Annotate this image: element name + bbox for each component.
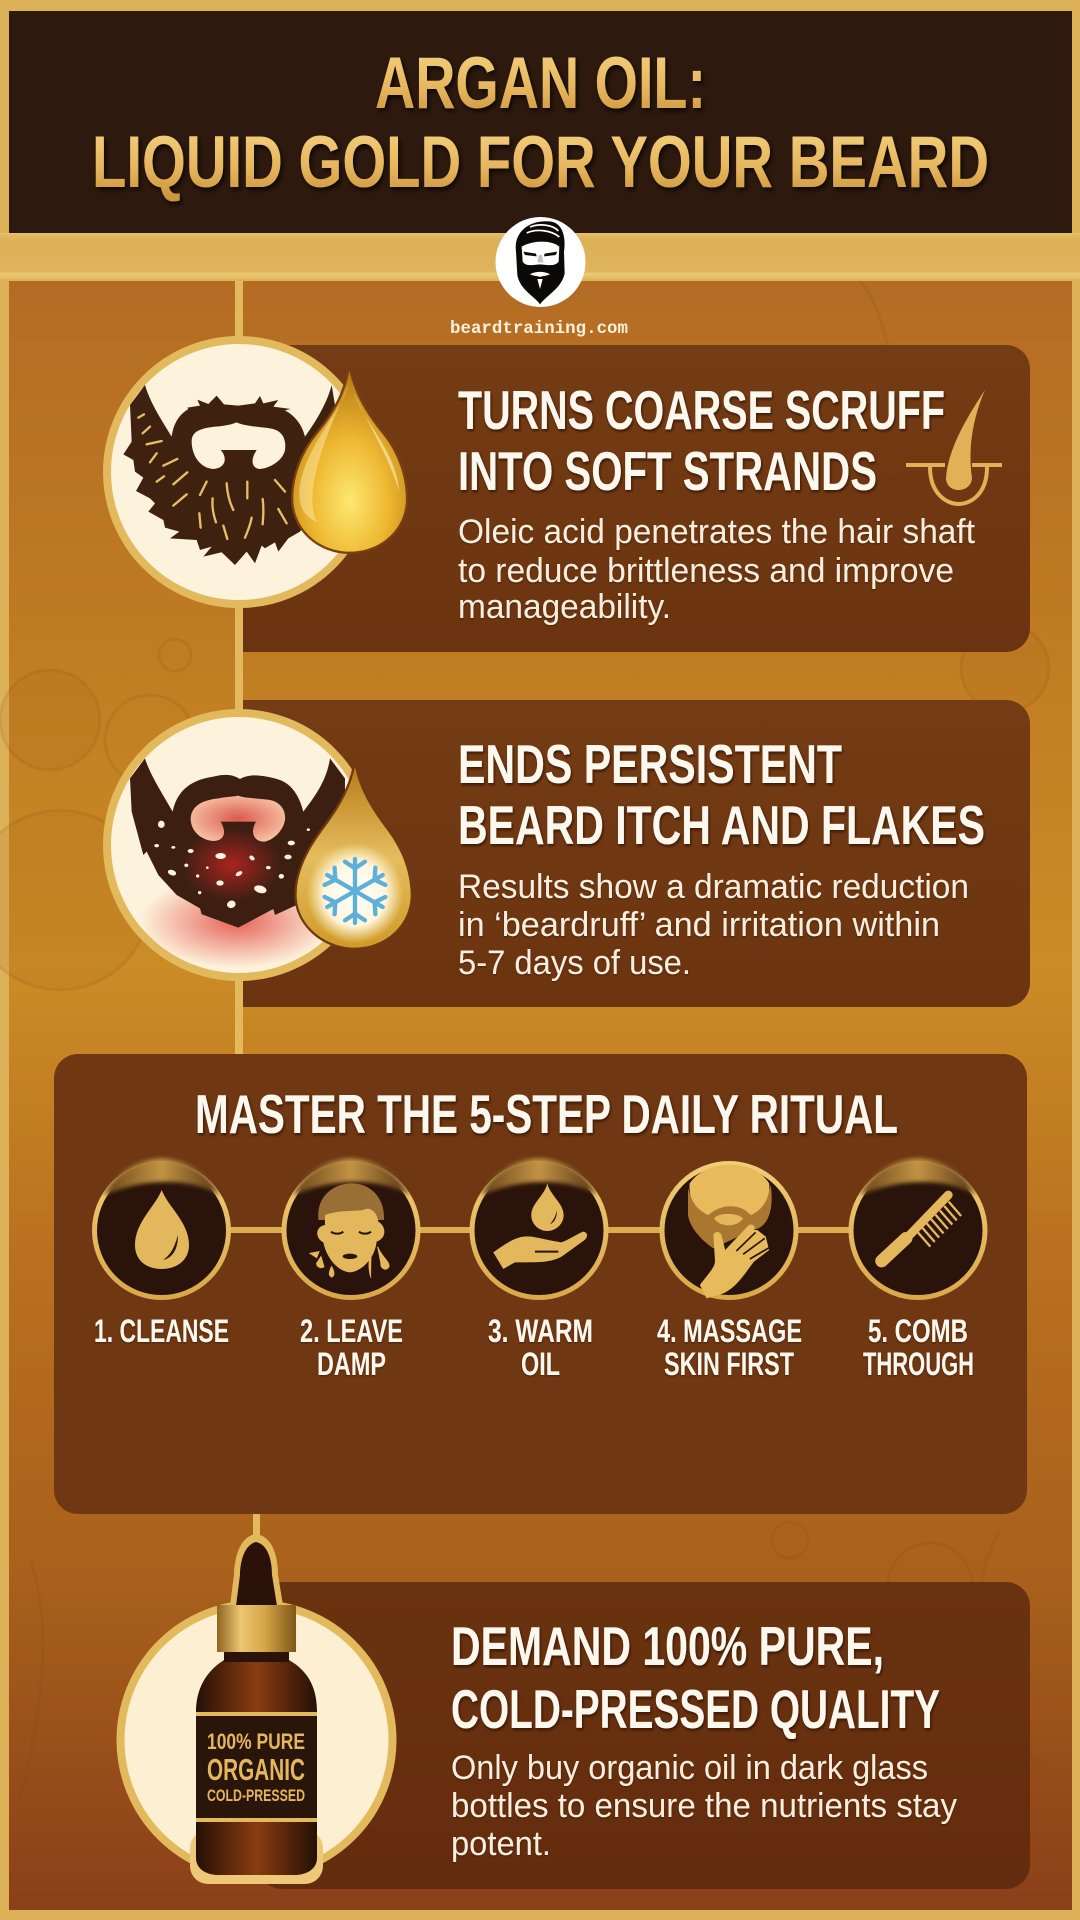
step 2 label: 2. LEAVE <box>300 1313 403 1349</box>
logo caption: beardtraining.com <box>450 319 628 339</box>
step 5 label: THROUGH <box>863 1346 974 1382</box>
bottle label: COLD-PRESSED <box>207 1786 305 1805</box>
icon: coarse beard with oil drop <box>107 340 406 604</box>
cooling drop <box>297 767 411 948</box>
quality body <box>451 1749 957 1863</box>
bottle label: ORGANIC <box>207 1752 305 1787</box>
gold collar <box>217 1605 296 1652</box>
connector to bottle <box>253 1514 260 1538</box>
step 1: cleanse <box>94 1159 229 1349</box>
itch heading: ENDS PERSISTENT <box>458 733 842 795</box>
step 5 label: 5. COMB <box>868 1313 968 1349</box>
step 4 label: 4. MASSAGE <box>657 1313 802 1349</box>
soft strands body: Oleic acid penetrates the hair shaft <box>458 513 976 551</box>
step 3: warm oil <box>472 1159 606 1382</box>
quality heading <box>451 1615 940 1740</box>
quality body: bottles to ensure the nutrients stay <box>451 1787 957 1825</box>
bottle base halo <box>190 1830 323 1884</box>
panel: pure quality <box>258 1582 1030 1889</box>
step 4 label <box>657 1313 802 1382</box>
bottle label: 100% PURE <box>207 1729 305 1754</box>
itch body: Results show a dramatic reduction <box>458 868 969 906</box>
step connector <box>225 1227 855 1233</box>
panel: itch and flakes <box>243 700 1030 1007</box>
header bar <box>9 11 1072 233</box>
icon: dark glass bottle <box>120 1540 392 1884</box>
panel: soft strands <box>243 345 1030 652</box>
panel: five step ritual <box>54 1054 1027 1514</box>
soft strands body <box>458 513 976 626</box>
itch body <box>458 868 969 982</box>
itch heading <box>458 733 985 856</box>
soft strands heading: INTO SOFT STRANDS <box>458 440 877 502</box>
soft strands body: to reduce brittleness and improve <box>458 552 954 590</box>
bottle label <box>196 1712 317 1822</box>
whiskers <box>138 414 287 539</box>
title: ARGAN OIL: <box>375 43 706 124</box>
coarse beard <box>123 385 340 565</box>
quality body: potent. <box>451 1825 551 1863</box>
irritated beard <box>130 758 345 928</box>
step 3 label: OIL <box>521 1346 560 1382</box>
bottle shoulder shade <box>224 1652 289 1662</box>
step 2 label: DAMP <box>317 1346 386 1382</box>
snowflake <box>322 859 388 923</box>
step 2: leave damp <box>284 1159 418 1382</box>
dropper bulb <box>236 1542 277 1606</box>
title <box>92 43 989 203</box>
flakes <box>154 821 310 909</box>
vertical timeline line <box>235 281 243 1055</box>
itch body: 5-7 days of use. <box>458 944 691 982</box>
quality body: Only buy organic oil in dark glass <box>451 1749 928 1787</box>
amber bottle <box>196 1652 317 1875</box>
step 4: massage skin first <box>657 1164 802 1382</box>
icon: irritated beard with cooling drop <box>107 713 411 977</box>
step 2 label <box>300 1313 403 1382</box>
gold band under header <box>0 233 1080 281</box>
soft strands heading <box>458 379 945 502</box>
icon: hair follicle <box>906 390 1002 504</box>
quality heading: DEMAND 100% PURE, <box>451 1615 884 1677</box>
itch body: in ‘beardruff’ and irritation within <box>458 906 940 944</box>
step 3 label <box>488 1313 593 1382</box>
step 5: comb through <box>851 1159 985 1382</box>
logo: bearded man <box>496 217 586 307</box>
dropper halo <box>236 1540 277 1606</box>
step 1 label: 1. CLEANSE <box>94 1313 229 1349</box>
skin redness <box>146 890 320 966</box>
step 5 label <box>863 1313 974 1382</box>
oil drop <box>293 371 406 552</box>
step 3 label: 3. WARM <box>488 1313 593 1349</box>
step 4 label: SKIN FIRST <box>664 1346 794 1382</box>
soft strands body: manageability. <box>458 588 671 626</box>
